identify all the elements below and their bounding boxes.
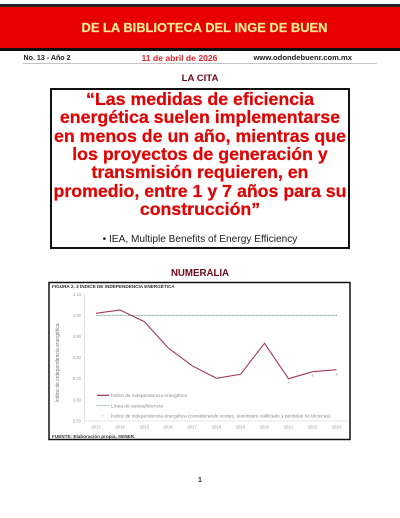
quote text [54,89,346,219]
y axis: 0.50 [73,418,82,424]
y axis: 0.60 [73,398,82,402]
quote text: construcción” [140,199,260,219]
heading: la cita: LA CITA [182,72,218,84]
banner title: DE LA BIBLIOTECA DEL INGE DE BUEN [82,20,327,35]
x axis: 2023 [332,424,342,430]
page number: 1 [198,475,202,484]
x axis: 2013 [91,424,101,430]
quote text: energética suelen implementarse [60,107,340,127]
x axis: 2014 [115,424,125,430]
x axis: 2019 [236,424,246,430]
date: 11 de abril de 2026 [142,52,217,62]
y axis [73,292,84,424]
x axis: 2021 [284,424,294,430]
header banner [0,4,400,51]
x axis: 2017 [187,424,197,430]
issue number: No. 13 - Año 2 [24,54,71,62]
x axis [84,421,348,430]
website: www.odondebuenr.com.mx [254,53,352,62]
panel: line chart [48,282,351,440]
y axis: 1.00 [73,313,82,318]
quote text: transmisión requieren, en [91,162,308,182]
x axis: 2016 [163,424,173,430]
y axis: 0.90 [73,334,82,339]
y axis: 0.70 [73,376,82,381]
legend: Índice de independencia energética (considerando ocotes, suministro calificado y pérdidas no técnicas) [111,412,331,419]
y axis title: Índice de independencia energética [54,323,61,402]
x axis: 2015 [140,424,150,430]
heading: numeralia: NUMERALIA [171,268,229,278]
x axis: 2022 [308,424,318,430]
x axis: 2018 [212,424,222,430]
quote attribution: • IEA, Multiple Benefits of Energy Efficiency [103,234,297,245]
y axis: 0.80 [73,355,82,360]
quote text: los proyectos de generación y [72,144,328,164]
legend [97,392,331,419]
quote text: “Las medidas de eficiencia [86,89,314,109]
panel: quote [50,88,350,248]
quote text: promedio, entre 1 y 7 años para su [54,180,346,200]
legend: Índice de independencia energética [111,392,187,399]
self-sufficiency line [96,314,337,316]
adjusted index markers [287,373,338,383]
quote text: en menos de un año, mientras que [54,126,346,146]
chart title: FIGURA 2. 3 ÍNDICE DE INDEPENDENCIA ENERGÉTICA [52,282,175,289]
header rule [23,63,377,64]
y axis: 1.10 [73,292,82,297]
chart source: FUENTE: Elaboración propia, SENER. [52,434,135,439]
legend: Línea de autosuficiencia [111,403,163,409]
x axis: 2020 [260,424,270,430]
energy independence line [96,310,336,379]
